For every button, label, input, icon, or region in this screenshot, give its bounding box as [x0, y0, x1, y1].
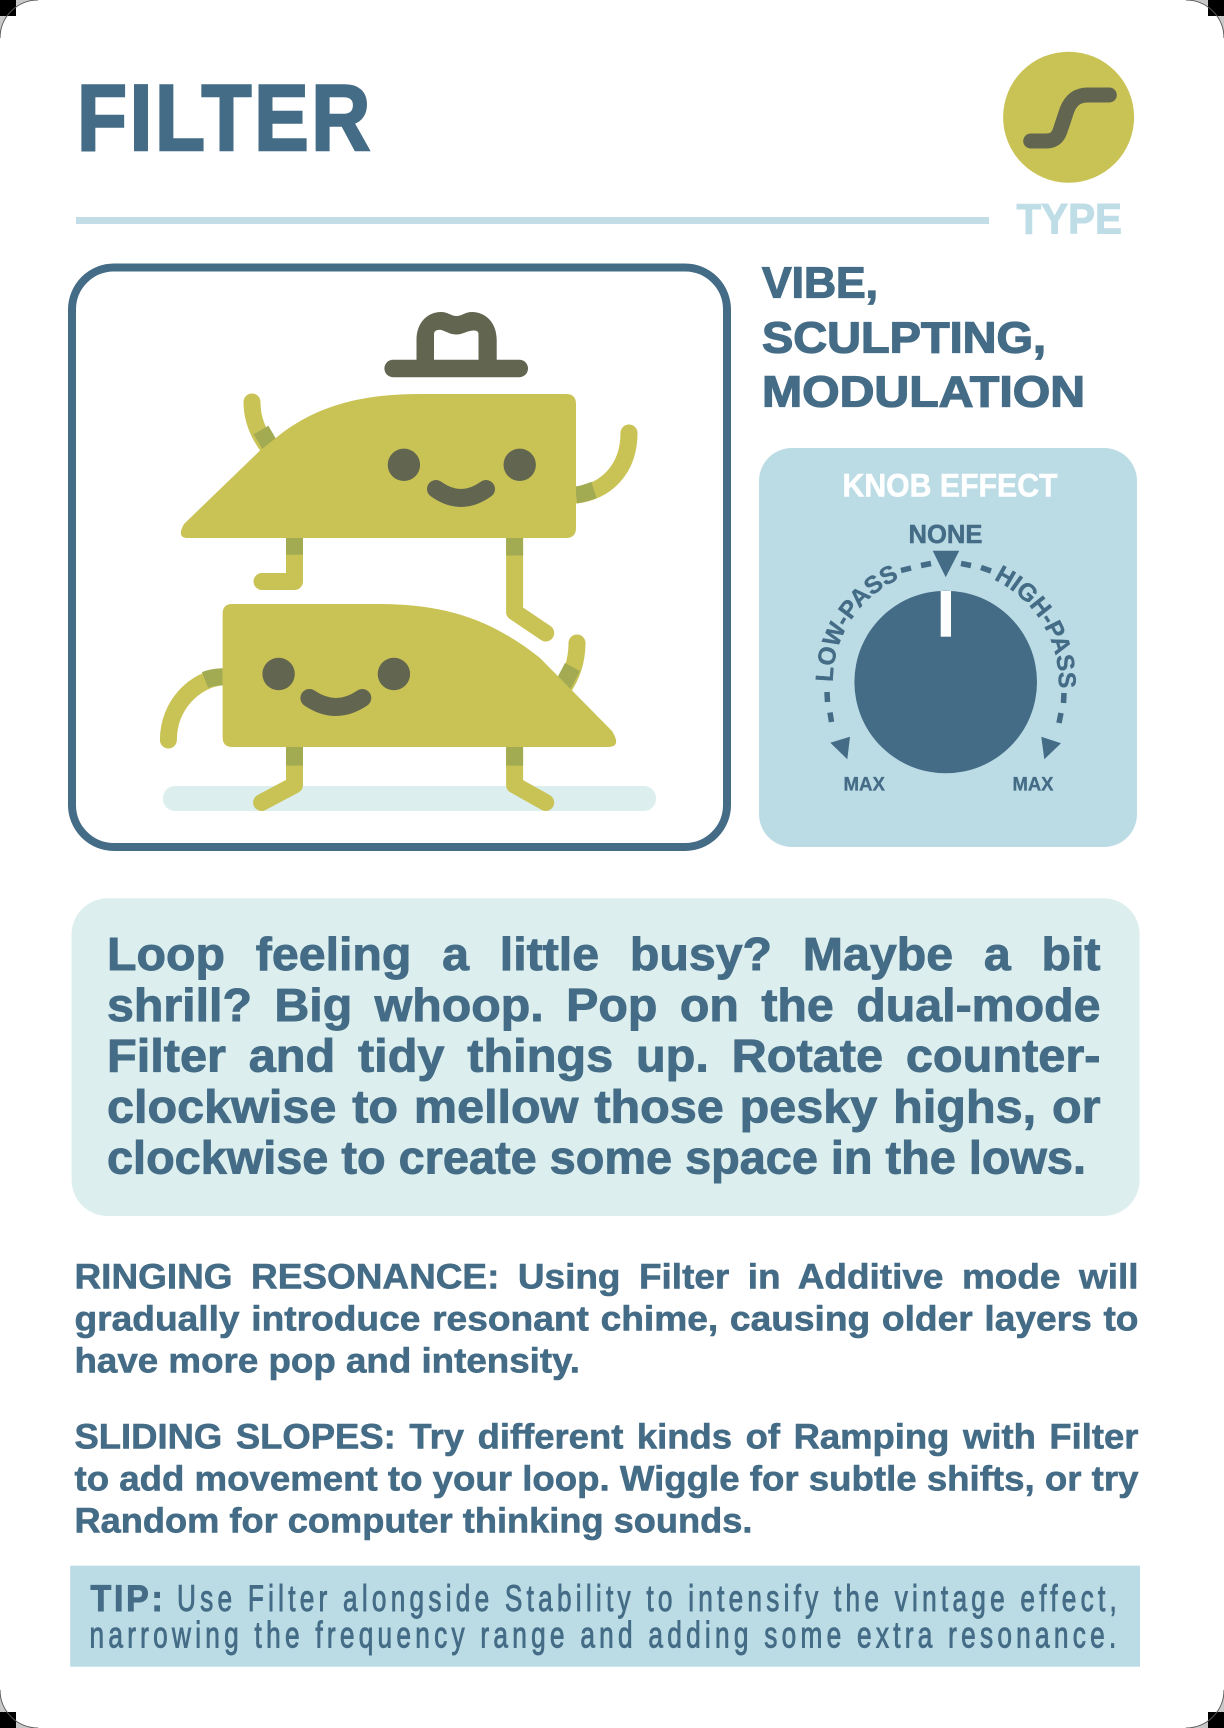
- categories: SCULPTING,: [762, 313, 1046, 362]
- panel: character illustration: [72, 268, 727, 847]
- description text: Filter and tidy things up. Rotate counter-: [107, 1030, 1100, 1082]
- tip text: [90, 1578, 1121, 1656]
- left max label: MAX: [844, 774, 885, 796]
- description text: [107, 928, 1101, 1183]
- knob dial: [854, 591, 1037, 773]
- categories: VIBE,: [762, 259, 878, 308]
- description text: shrill? Big whoop. Pop on the dual-mode: [107, 979, 1100, 1031]
- text block: sliding slopes: SLIDING SLOPES: Try different kinds of Ramping with Filter: [74, 1417, 1139, 1456]
- none label: NONE: [908, 521, 982, 549]
- categories: [762, 259, 1085, 417]
- high-pass arc label: HIGH-PASS: [994, 565, 1076, 688]
- tip text: TIP:: [90, 1578, 166, 1619]
- description text: Loop feeling a little busy? Maybe a bit: [107, 928, 1100, 980]
- low-pass arc label: LOW-PASS: [816, 566, 898, 681]
- text block: sliding slopes: Random for computer thinking sounds.: [74, 1502, 752, 1541]
- text block: ringing resonance: [74, 1257, 1138, 1381]
- description text: clockwise to mellow those pesky highs, or: [107, 1081, 1101, 1133]
- type label: TYPE: [1016, 196, 1122, 244]
- dial dashes: [827, 564, 1064, 723]
- icon: type badge: [1003, 52, 1134, 183]
- character: top: [181, 394, 629, 633]
- text block: sliding slopes: to add movement to your loop. Wiggle for subtle shifts, or try: [74, 1460, 1139, 1499]
- icon: hat: [384, 312, 528, 377]
- categories: MODULATION: [762, 368, 1085, 417]
- knob heading: KNOB EFFECT: [842, 468, 1058, 504]
- text block: ringing resonance: RINGING RESONANCE: Using Filter in Additive mode will: [74, 1257, 1138, 1296]
- title: FILTER: [77, 65, 373, 170]
- panel: description: [72, 898, 1140, 1216]
- ground shadow: [163, 786, 656, 811]
- text block: sliding slopes: [74, 1417, 1139, 1541]
- text block: ringing resonance: gradually introduce resonant chime, causing older layers to: [74, 1300, 1138, 1339]
- description text: clockwise to create some space in the lows.: [107, 1131, 1086, 1183]
- right max pointer: [1041, 737, 1061, 759]
- left max pointer: [830, 737, 850, 759]
- character: bottom: [168, 604, 616, 802]
- panel: knob effect: [759, 448, 1137, 847]
- right max label: MAX: [1012, 774, 1054, 796]
- text block: ringing resonance: have more pop and intensity.: [74, 1342, 580, 1381]
- panel: tip: [70, 1566, 1140, 1667]
- none pointer: [933, 551, 959, 577]
